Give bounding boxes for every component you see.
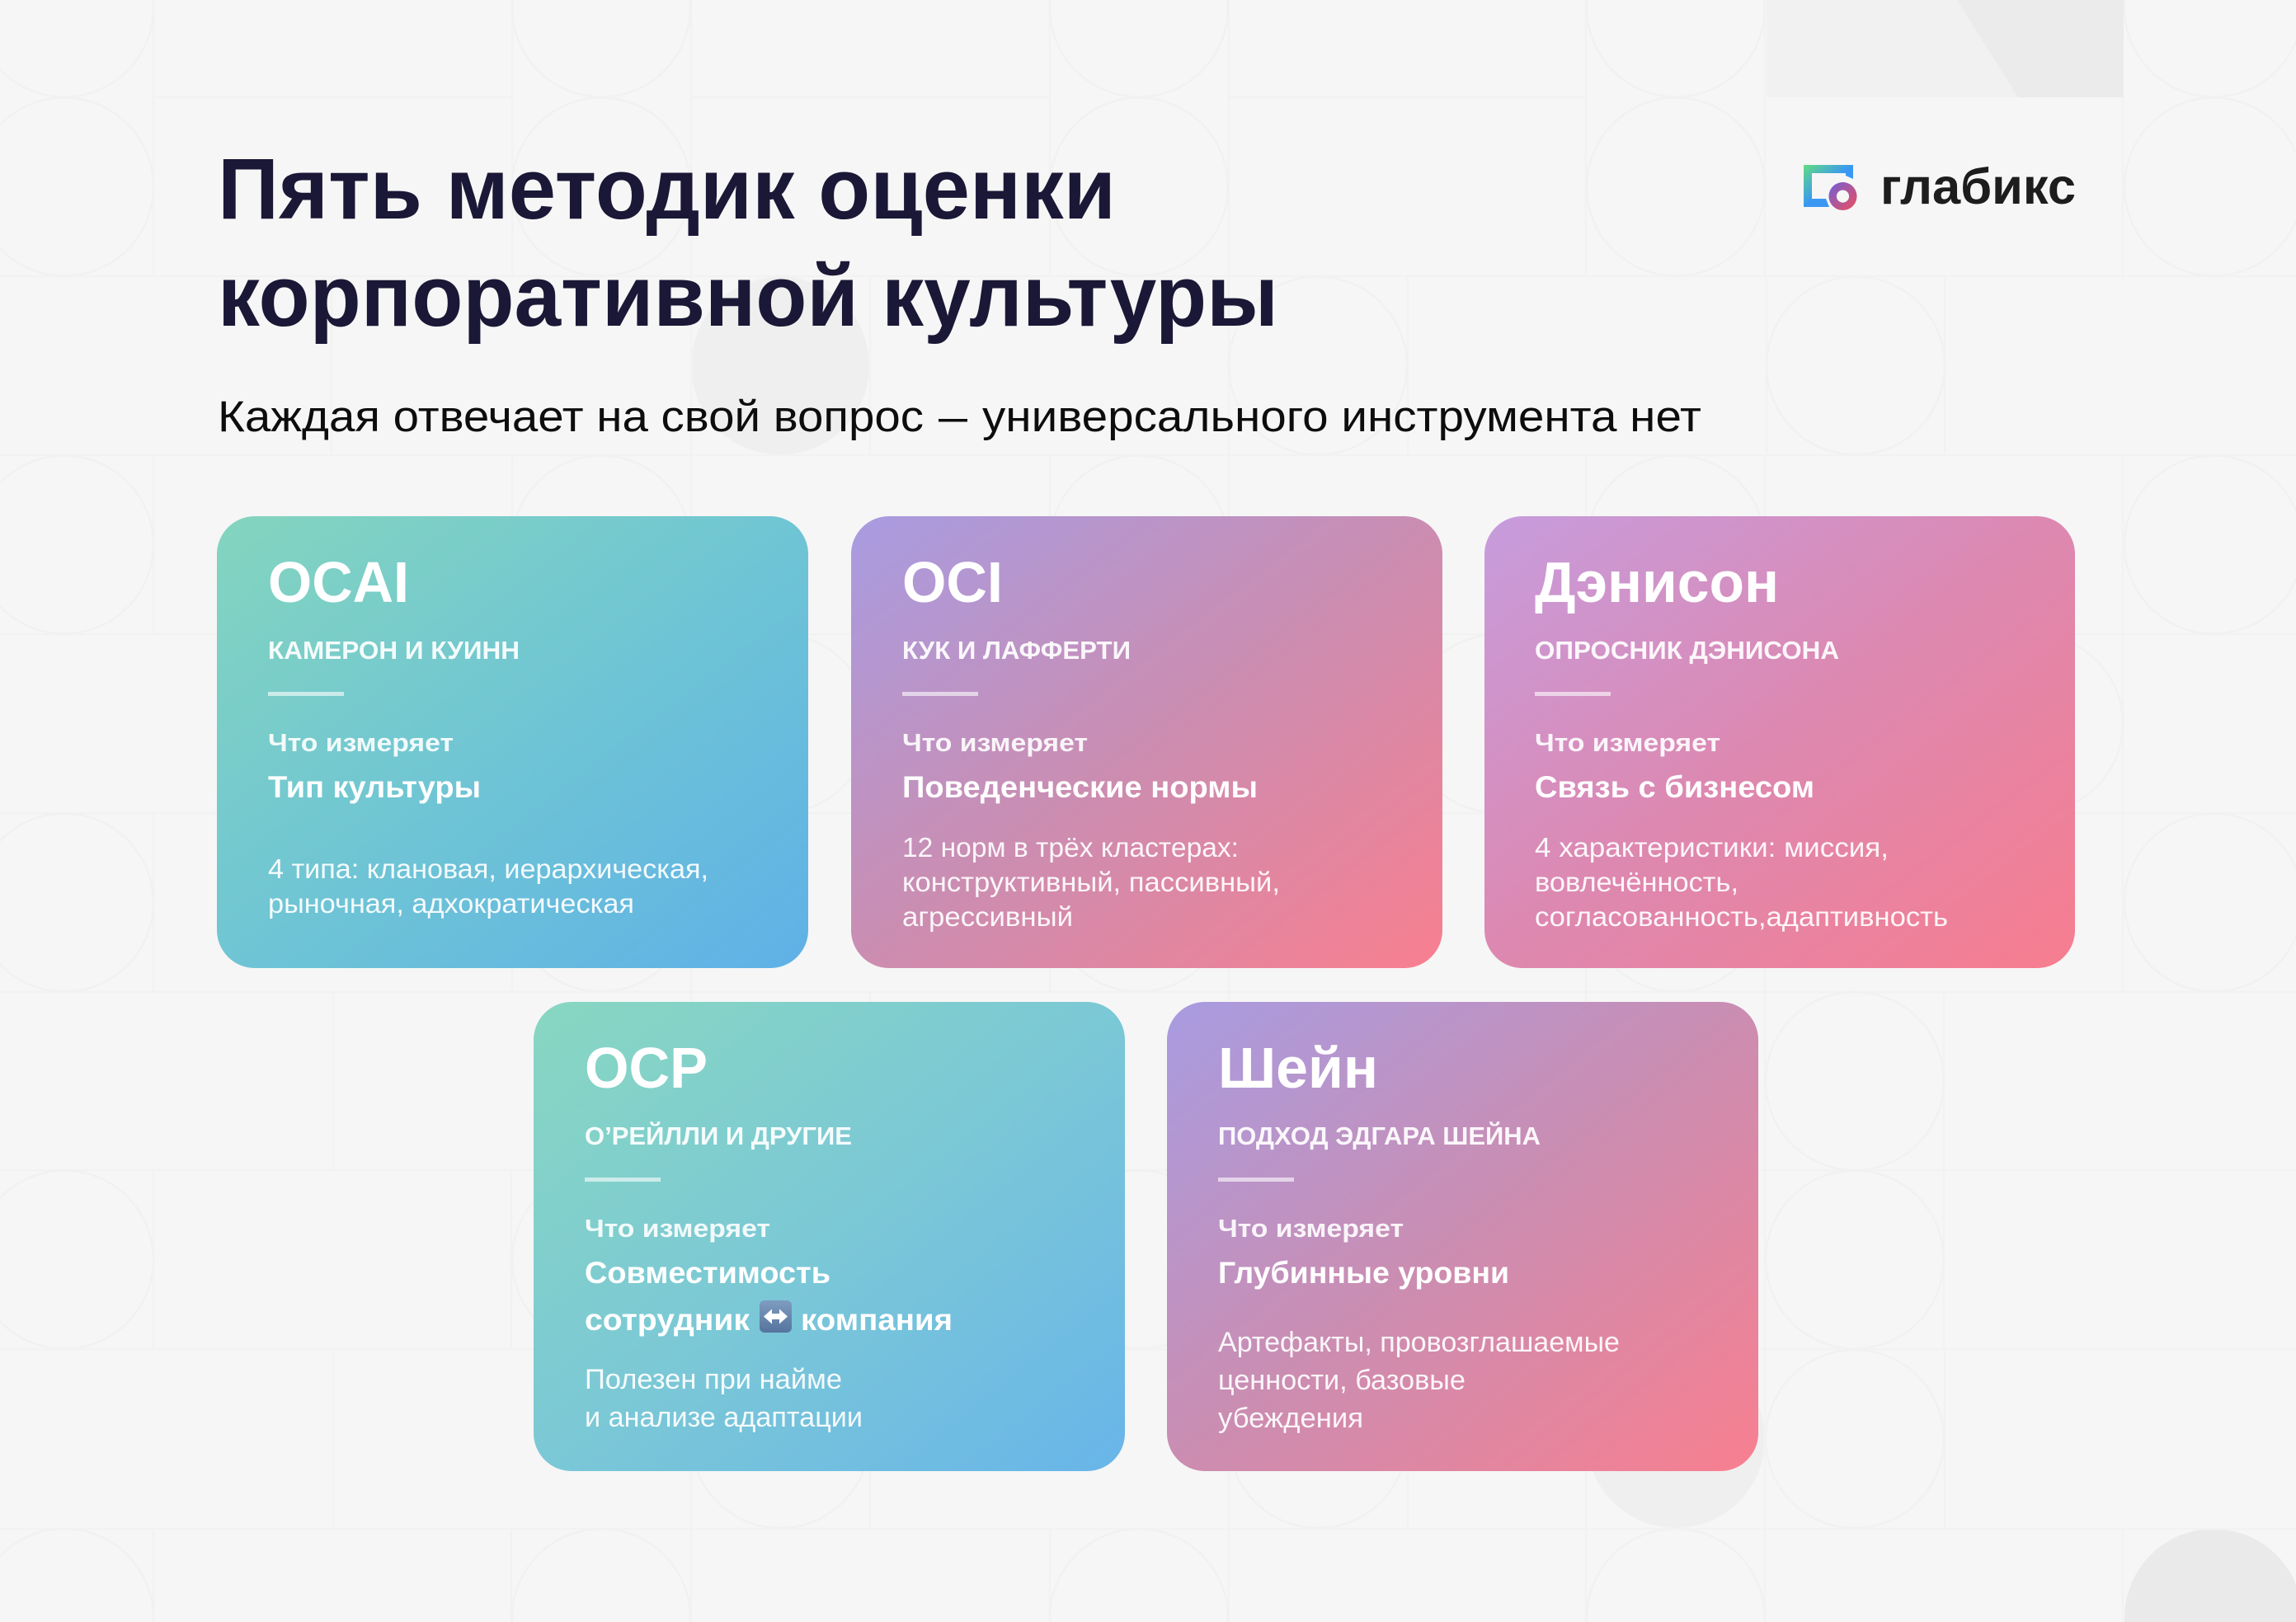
description — [585, 1364, 863, 1433]
authors: КУК И ЛАФФЕРТИ — [902, 636, 1131, 665]
icon: logo mark — [1804, 165, 1857, 210]
subtitle: Каждая отвечает на свой вопрос — [218, 393, 924, 441]
title — [218, 141, 1278, 345]
description: ценности, базовые — [1218, 1365, 1466, 1396]
panel: OCAI — [217, 516, 808, 968]
subtitle — [218, 393, 1701, 441]
authors: О’РЕЙЛЛИ И ДРУГИЕ — [585, 1121, 852, 1150]
authors: ОПРОСНИК ДЭНИСОНА — [1535, 636, 1839, 665]
method name: OCP — [585, 1036, 708, 1100]
measured value: сотрудник — [585, 1303, 750, 1337]
description: убеждения — [1218, 1403, 1363, 1434]
description: 4 характеристики: миссия, — [1535, 832, 1889, 863]
description: вовлечённость, — [1535, 867, 1738, 897]
method name: OCAI — [268, 550, 409, 614]
measured value: Тип культуры — [268, 770, 481, 804]
label: Что измеряет — [268, 728, 454, 757]
description: конструктивный, пассивный, — [902, 867, 1280, 897]
method name: OCI — [902, 550, 1003, 614]
description: 12 норм в трёх кластерах: — [902, 832, 1239, 863]
description: рыночная, адхократическая — [268, 888, 634, 919]
method name: Дэнисон — [1535, 550, 1779, 614]
panel: Шейн — [1167, 1002, 1758, 1471]
subtitle: — — [939, 393, 967, 441]
measured value: Связь с бизнесом — [1535, 770, 1814, 804]
logo wordmark: глабикс — [1880, 158, 2076, 214]
measured value: Совместимость — [585, 1256, 830, 1290]
title: корпоративной культуры — [218, 248, 1278, 345]
logo: глабикс — [1804, 158, 2076, 214]
subtitle: универсального инструмента нет — [982, 393, 1701, 441]
label: Что измеряет — [585, 1214, 770, 1243]
description — [902, 832, 1280, 932]
label: Что измеряет — [1535, 728, 1720, 757]
label: Что измеряет — [902, 728, 1088, 757]
measured value: Поведенческие нормы — [902, 770, 1258, 804]
description — [268, 853, 708, 919]
measured value: компания — [801, 1303, 953, 1337]
description: и анализе адаптации — [585, 1402, 863, 1433]
method name: Шейн — [1218, 1036, 1378, 1100]
description: Полезен при найме — [585, 1364, 842, 1395]
authors: КАМЕРОН И КУИНН — [268, 636, 520, 665]
description — [1535, 832, 1948, 932]
icon: left-right arrow — [760, 1300, 792, 1333]
description — [1218, 1327, 1620, 1434]
description: согласованность,адаптивность — [1535, 901, 1948, 932]
panel: OCP — [534, 1002, 1125, 1471]
authors: ПОДХОД ЭДГАРА ШЕЙНА — [1218, 1121, 1541, 1150]
measured value — [585, 1256, 953, 1337]
title: Пять методик оценки — [218, 141, 1116, 237]
panel: Денисон — [1484, 516, 2075, 968]
description: агрессивный — [902, 901, 1073, 932]
panel: OCI — [851, 516, 1442, 968]
label: Что измеряет — [1218, 1214, 1404, 1243]
description: 4 типа: клановая, иерархическая, — [268, 853, 708, 884]
description: Артефакты, провозглашаемые — [1218, 1327, 1620, 1358]
measured value: Глубинные уровни — [1218, 1256, 1509, 1290]
